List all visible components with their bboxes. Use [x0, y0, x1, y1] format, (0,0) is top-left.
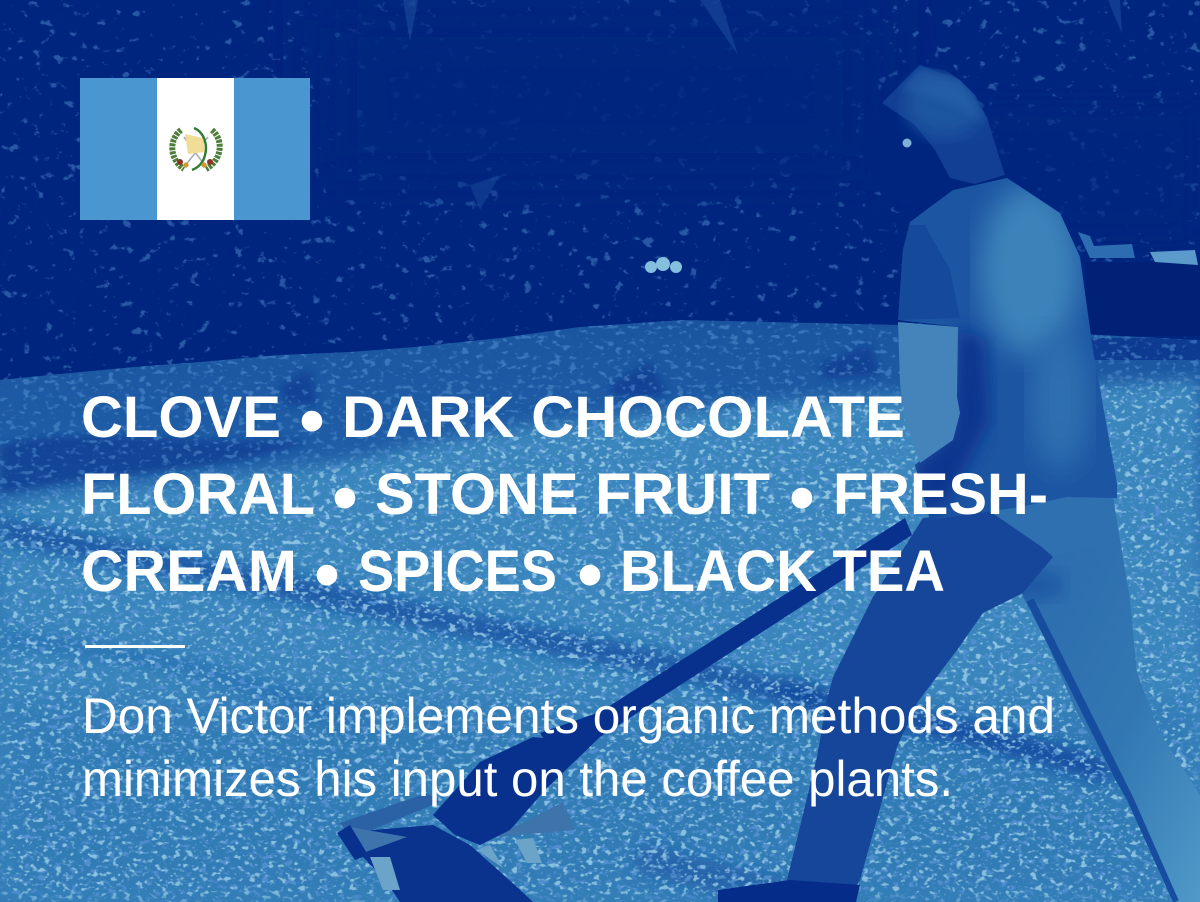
- wooden planks: [350, 827, 407, 853]
- rake: long handle and wooden head: [337, 518, 912, 902]
- person pushing the rake: [718, 60, 1200, 902]
- headline: tasting notes: •: [314, 535, 340, 615]
- headline: tasting notes: •: [332, 458, 358, 538]
- long sleeve arm: [898, 322, 960, 463]
- headline: tasting notes: BLACK TEA: [620, 539, 945, 604]
- lit seat of the jeans: [985, 497, 1118, 556]
- headline: tasting notes: STONE FRUIT: [375, 462, 770, 527]
- headline: tasting notes: [81, 381, 1048, 615]
- ground shadow streaks: [0, 530, 1100, 902]
- headline: tasting notes: CLOVE: [81, 385, 281, 450]
- headline: tasting notes: FLORAL: [81, 462, 315, 527]
- headline: tasting notes: DARK CHOCOLATE: [342, 385, 905, 450]
- back leg: [1022, 499, 1200, 902]
- headline: tasting notes: CREAM: [81, 539, 297, 604]
- front leg and hips: [787, 510, 1053, 897]
- tines: [370, 857, 400, 890]
- Guatemalan flag: [80, 78, 310, 220]
- torso: [898, 178, 1117, 520]
- low wall on the right: [1078, 232, 1200, 336]
- head end block: [337, 825, 368, 860]
- headline: tasting notes: FRESH-: [833, 462, 1048, 527]
- headline: tasting notes: •: [789, 458, 815, 538]
- rake shadow on the ground: [337, 825, 533, 902]
- distant white blossom: [645, 257, 682, 273]
- icon: coat of arms: [172, 128, 220, 170]
- hood and head: [862, 65, 1005, 203]
- earbud: [902, 138, 912, 148]
- headline: tasting notes: •: [577, 535, 603, 615]
- dark foliage backdrop: [0, 0, 1200, 400]
- shoe: [718, 880, 860, 902]
- divider rule: [85, 645, 185, 648]
- headline: tasting notes: •: [299, 381, 325, 461]
- body text: Don Victor implements organic methods and: [82, 688, 1055, 744]
- headline: tasting notes: SPICES: [358, 539, 557, 604]
- dark handle: [433, 518, 912, 845]
- brace: [340, 793, 440, 838]
- body text: [82, 688, 1055, 807]
- flag stripes: [80, 78, 310, 220]
- gravel ground: [0, 320, 1200, 902]
- body text: minimizes his input on the coffee plants.: [82, 751, 953, 807]
- short sleeve: [898, 225, 960, 320]
